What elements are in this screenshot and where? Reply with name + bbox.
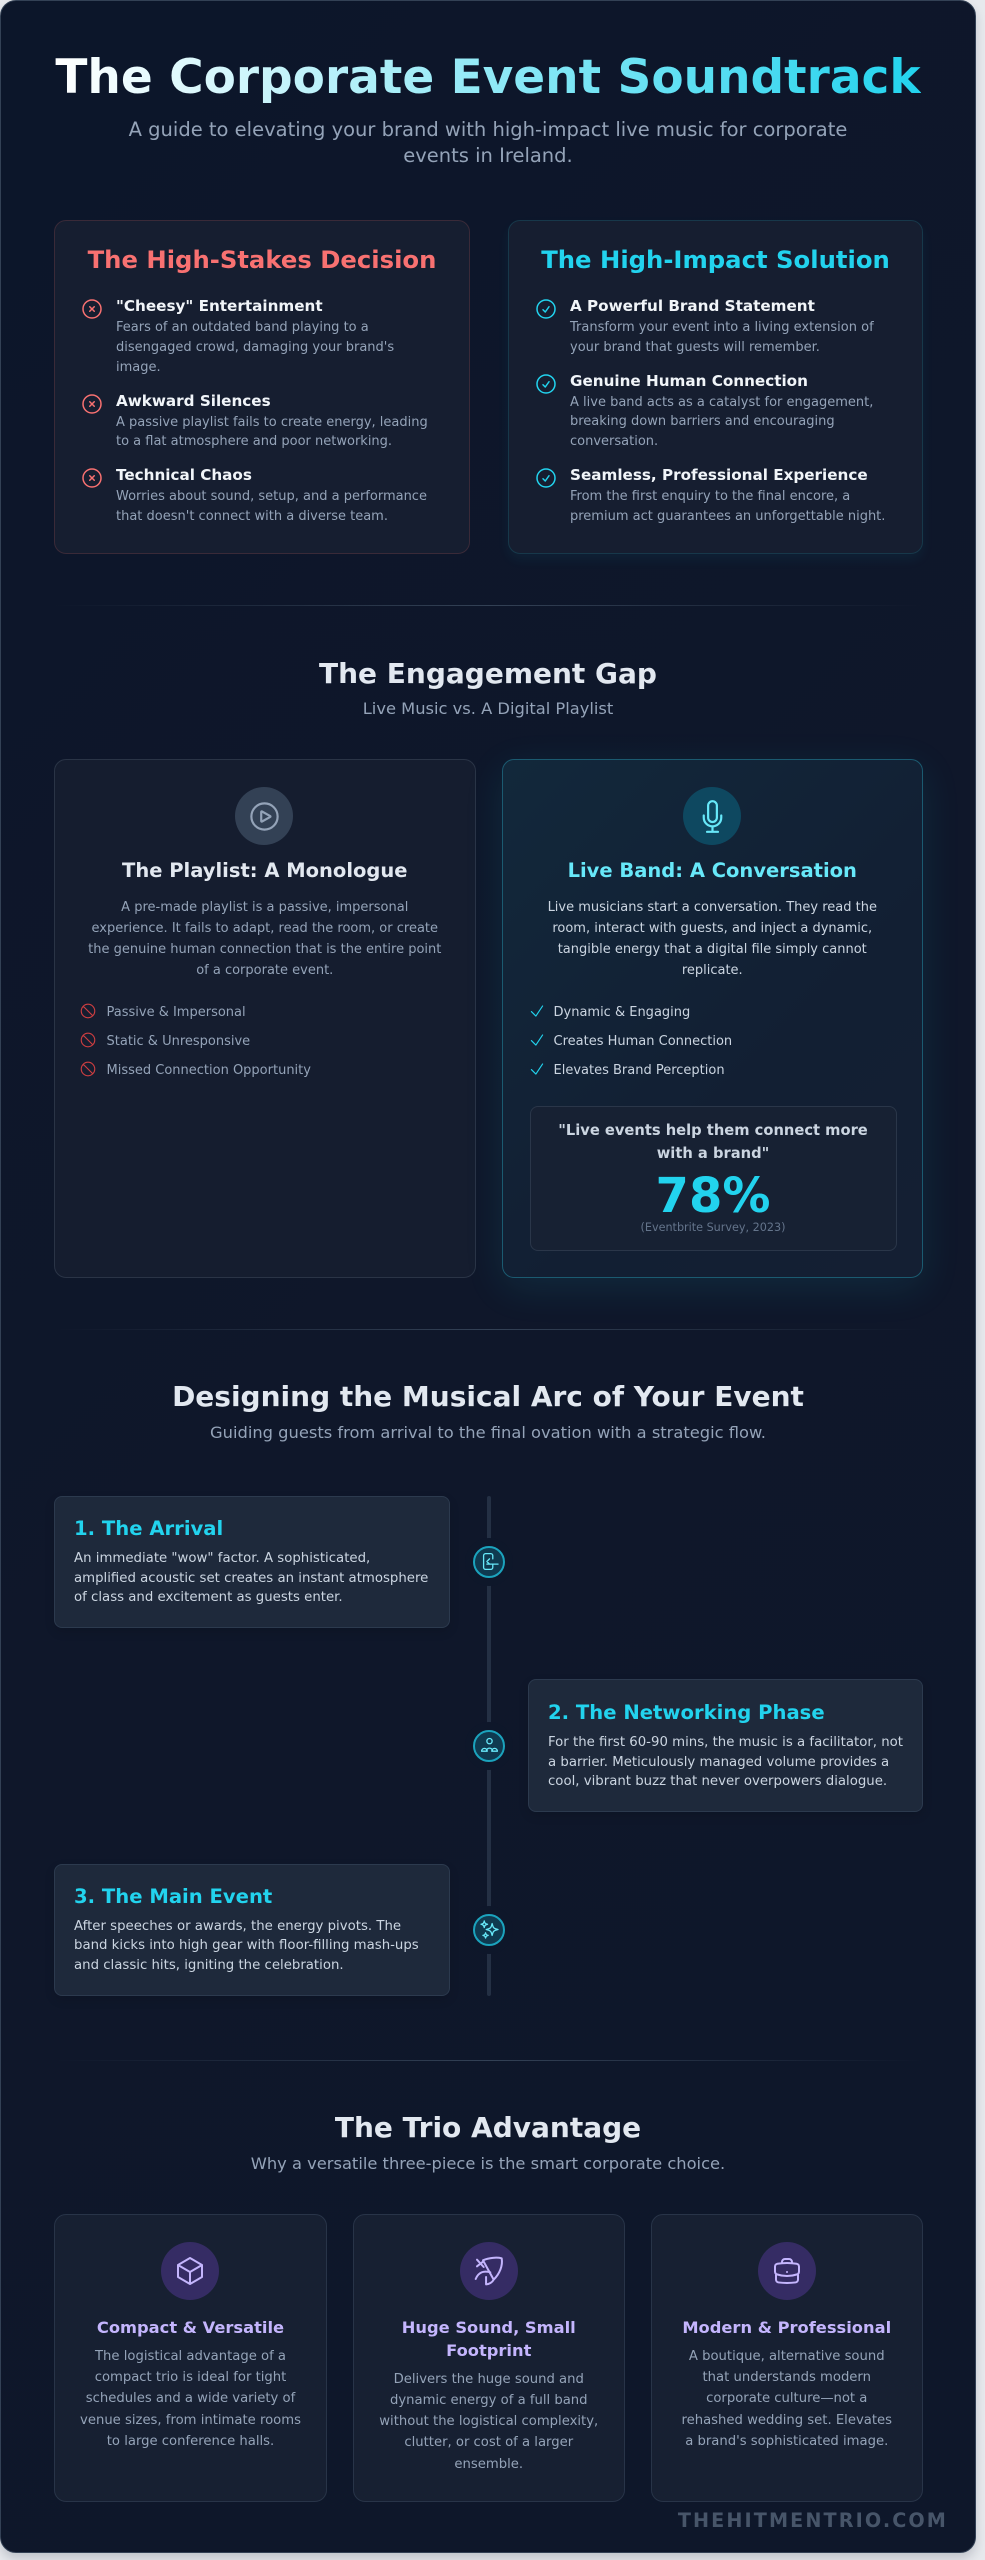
card text: compact trio is ideal for tight — [95, 2370, 286, 2385]
stat callout: 78 percent — [530, 1106, 896, 1251]
card text: a brand's sophisticated image. — [685, 2434, 888, 2449]
section heading: trio advantage: The Trio Advantage — [335, 2111, 641, 2144]
panel: huge sound small footprint — [352, 2214, 625, 2502]
card text: ensemble. — [454, 2456, 523, 2472]
item: powerful brand statement — [536, 297, 874, 355]
item: powerful brand statement: A Powerful Brand Statement — [570, 297, 815, 315]
quote — [558, 1122, 868, 1162]
icon: cube — [161, 2242, 219, 2300]
step description — [548, 1735, 903, 1789]
quote: with a brand" — [657, 1145, 769, 1162]
card text: Delivers the huge sound and — [394, 2372, 584, 2387]
card heading — [402, 2318, 576, 2360]
item: cheesy entertainment: disengaged crowd, damaging your brand's — [116, 340, 394, 355]
panel: compact and versatile — [54, 2214, 327, 2502]
section subtitle: engagement gap: Live Music vs. A Digital Playlist — [363, 699, 613, 718]
list item: static: Static & Unresponsive — [106, 1034, 250, 1049]
step description: An immediate "wow" factor. A sophisticated, — [74, 1551, 370, 1566]
icon: play circle — [235, 787, 293, 845]
step title: 1. The Arrival — [74, 1517, 223, 1540]
timeline card: the networking phase — [528, 1679, 923, 1812]
item: technical chaos: that doesn't connect with a diverse team. — [116, 509, 388, 524]
panel: the high-impact solution — [508, 220, 923, 554]
item: genuine human connection: Genuine Human Connection — [570, 372, 808, 390]
heading: high-impact solution: The High-Impact Solution — [541, 245, 890, 274]
item: seamless experience: From the first enquiry to the final encore, a — [570, 489, 850, 504]
stat number: 78% — [656, 1168, 770, 1224]
text: live band description: replicate. — [682, 963, 743, 978]
card text: to large conference halls. — [107, 2434, 274, 2449]
item: seamless experience: premium act guarantees an unforgettable night. — [570, 509, 885, 524]
item: cheesy entertainment — [82, 297, 394, 375]
subtitle: events in Ireland. — [403, 144, 573, 167]
item: awkward silences: Awkward Silences — [116, 392, 271, 410]
quote: "Live events help them connect more — [558, 1122, 868, 1139]
icon: briefcase — [758, 2242, 816, 2300]
item: powerful brand statement: your brand that guests will remember. — [570, 340, 820, 355]
text: playlist description: A pre-made playlist is a passive, impersonal — [121, 900, 408, 915]
item: genuine human connection: breaking down barriers and encouraging — [570, 414, 835, 429]
step description: amplified acoustic set creates an instant atmosphere — [74, 1571, 428, 1586]
step description: a barrier. Meticulously managed volume provides a — [548, 1755, 889, 1770]
text: playlist description: the genuine human connection that is the entire point — [88, 942, 441, 957]
text: playlist description: of a corporate event. — [196, 963, 333, 978]
item: technical chaos: Technical Chaos — [116, 466, 252, 484]
item: awkward silences: to a flat atmosphere and poor networking. — [116, 434, 392, 449]
card heading: Huge Sound, Small — [402, 2318, 576, 2337]
item: cheesy entertainment: image. — [116, 360, 161, 375]
panel: the playlist — [54, 759, 476, 1278]
item: genuine human connection — [536, 372, 873, 449]
step description: of class and excitement as guests enter. — [74, 1590, 343, 1605]
item: genuine human connection: conversation. — [570, 434, 658, 449]
heading: high-stakes decision: The High-Stakes Decision — [88, 245, 436, 274]
card text: A boutique, alternative sound — [689, 2349, 885, 2364]
step title: 3. The Main Event — [74, 1884, 272, 1908]
step description: band kicks into high gear with floor-filling mash-ups — [74, 1938, 419, 1953]
section subtitle: musical arc: Guiding guests from arrival to the final ovation with a strategic flow. — [210, 1423, 766, 1442]
card text: venue sizes, from intimate rooms — [80, 2413, 301, 2428]
timeline node: networking icon — [473, 1730, 505, 1762]
timeline line — [486, 1496, 490, 1996]
step description — [74, 1551, 428, 1605]
heading: playlist monologue: The Playlist: A Monologue — [122, 859, 407, 882]
card text: clutter, or cost of a larger — [404, 2435, 573, 2450]
item: powerful brand statement: Transform your event into a living extension of — [570, 320, 874, 335]
item: awkward silences — [82, 392, 428, 449]
card text: that understands modern — [703, 2370, 871, 2385]
text: live band description: room, interact with guests, and inject a dynamic, — [552, 921, 872, 936]
step description: For the first 60-90 mins, the music is a facilitator, not — [548, 1735, 903, 1750]
card heading: Footprint — [446, 2341, 531, 2360]
text: playlist description: experience. It fails to adapt, read the room, or create — [92, 921, 438, 936]
item: cheesy entertainment: "Cheesy" Entertainment — [116, 297, 323, 315]
step title: 2. The Networking Phase — [548, 1701, 825, 1724]
card text: rehashed wedding set. Elevates — [681, 2413, 892, 2428]
item: cheesy entertainment: Fears of an outdated band playing to a — [116, 320, 369, 335]
text: playlist description — [88, 900, 442, 978]
subtitle — [128, 118, 847, 167]
icon: microphone — [683, 787, 741, 845]
heading: live band conversation: Live Band: A Conversation — [568, 859, 857, 882]
step description — [74, 1918, 419, 1973]
list item: dynamic: Dynamic & Engaging — [554, 1004, 690, 1020]
item: seamless experience — [536, 466, 885, 524]
card text: The logistical advantage of a — [95, 2349, 286, 2364]
section heading: engagement gap: The Engagement Gap — [319, 657, 657, 690]
step description: and classic hits, igniting the celebration. — [74, 1958, 344, 1973]
card heading: Compact & Versatile — [97, 2318, 284, 2337]
section subtitle: trio advantage: Why a versatile three-piece is the smart corporate choice. — [251, 2154, 725, 2173]
card text: without the logistical complexity, — [379, 2414, 598, 2429]
list item: missed connection: Missed Connection Opportunity — [106, 1063, 311, 1078]
item: seamless experience: Seamless, Professional Experience — [570, 466, 868, 484]
item: technical chaos — [82, 466, 427, 524]
card text: dynamic energy of a full band — [390, 2393, 588, 2408]
text: live band description — [548, 900, 877, 978]
card text — [681, 2349, 892, 2449]
card text — [379, 2372, 598, 2472]
item: awkward silences: A passive playlist fails to create energy, leading — [116, 414, 428, 430]
card heading: Modern & Professional — [682, 2318, 891, 2337]
panel: the high-stakes decision — [54, 220, 470, 554]
timeline card: the main event — [54, 1864, 450, 1996]
item: genuine human connection: A live band acts as a catalyst for engagement, — [570, 394, 873, 410]
title: The Corporate Event Soundtrack — [55, 50, 921, 105]
timeline card: the arrival — [54, 1496, 450, 1628]
list item: passive: Passive & Impersonal — [106, 1004, 246, 1020]
list item: brand perception: Elevates Brand Perception — [554, 1063, 725, 1078]
timeline node: main event icon — [473, 1914, 505, 1946]
timeline node: arrival icon — [473, 1546, 505, 1578]
card text — [80, 2349, 301, 2449]
section heading: musical arc: Designing the Musical Arc of Your Event — [172, 1380, 804, 1413]
item: technical chaos: Worries about sound, setup, and a performance — [116, 489, 427, 504]
text: live band description: Live musicians start a conversation. They read the — [548, 900, 877, 915]
step description: After speeches or awards, the energy pivots. The — [74, 1918, 401, 1934]
icon: rocket — [460, 2242, 518, 2300]
stat source: (Eventbrite Survey, 2023) — [641, 1221, 785, 1234]
card text: corporate culture—not a — [706, 2391, 867, 2406]
text: live band description: tangible energy that a digital file simply cannot — [558, 942, 867, 957]
subtitle: A guide to elevating your brand with high-impact live music for corporate — [129, 118, 847, 141]
list item: human connection: Creates Human Connection — [554, 1034, 732, 1049]
watermark: THEHITMENTRIO.COM — [678, 2509, 948, 2532]
panel: live band — [502, 759, 923, 1278]
card text: schedules and a wide variety of — [86, 2391, 295, 2406]
panel: modern and professional — [650, 2214, 923, 2502]
step description: cool, vibrant buzz that never overpowers dialogue. — [548, 1774, 887, 1789]
